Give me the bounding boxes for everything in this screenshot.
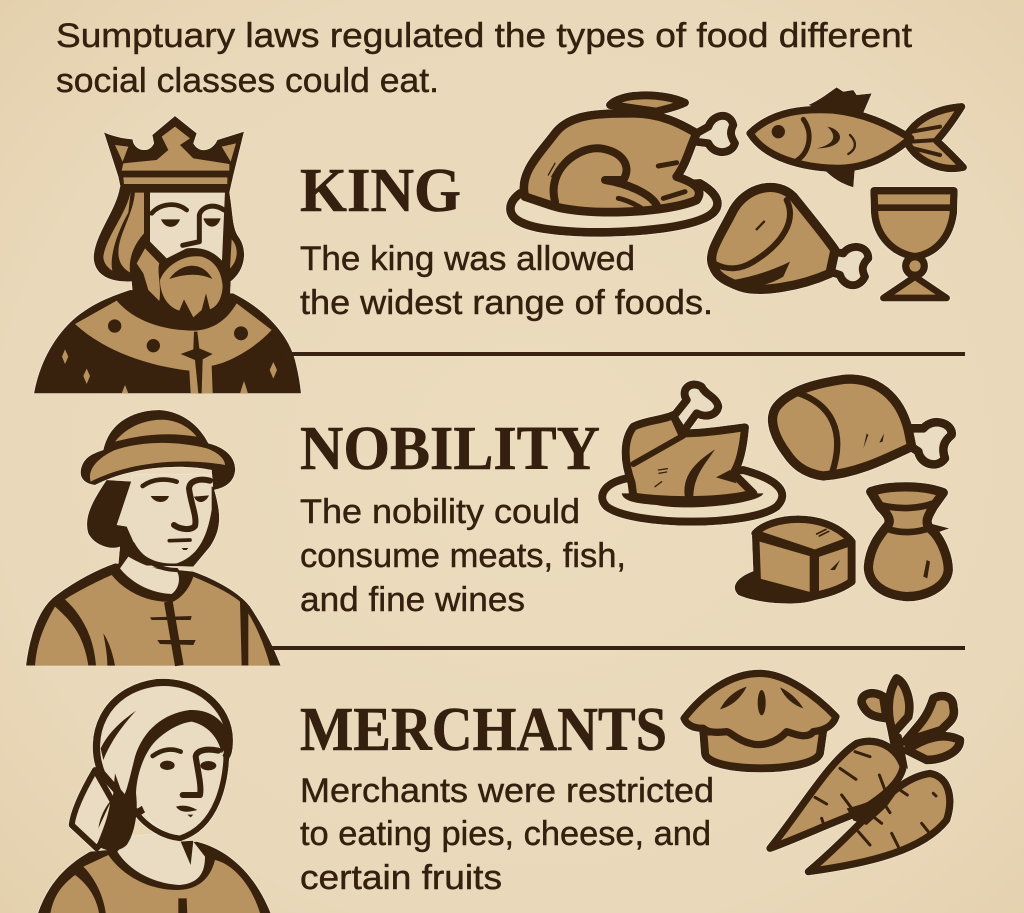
text: merchants description: Merchants were restricted <box>300 772 714 810</box>
icon: roast turkey on plate <box>510 95 735 232</box>
icon: fish <box>750 87 963 187</box>
icon: ham leg <box>712 187 868 289</box>
panel: nobility <box>26 379 952 666</box>
icon: goblet <box>873 191 955 298</box>
icons: nobility foods <box>602 379 952 604</box>
panel: king <box>34 87 963 393</box>
panel: merchants <box>37 673 960 913</box>
text: king description <box>300 240 713 322</box>
icon: king portrait <box>34 116 301 393</box>
heading: MERCHANTS: MERCHANTS <box>300 696 667 764</box>
icon: carrots <box>770 678 960 872</box>
text: king description: the widest range of foods. <box>300 284 713 322</box>
icon: noble portrait <box>26 410 281 666</box>
title: social classes could eat. <box>56 62 439 100</box>
icon: ham <box>773 379 952 476</box>
icon: wine jug <box>868 487 949 597</box>
heading: KING: KING <box>300 157 461 225</box>
divider line <box>272 646 965 650</box>
icons: merchant foods <box>684 673 960 872</box>
text: merchants description: to eating pies, cheese, and <box>300 815 711 853</box>
text: nobility description: The nobility could <box>300 493 580 531</box>
title <box>56 17 913 100</box>
title: Sumptuary laws regulated the types of food different <box>56 17 913 55</box>
icon: merchant portrait <box>37 682 271 913</box>
text: nobility description <box>300 493 626 619</box>
text: merchants description <box>300 772 714 897</box>
divider line <box>285 352 965 356</box>
text: merchants description: certain fruits <box>300 859 502 897</box>
text: king description: The king was allowed <box>300 240 635 278</box>
icons: king foods <box>510 87 963 298</box>
text: nobility description: consume meats, fish, <box>300 537 626 575</box>
icon: pie <box>684 673 836 768</box>
icon: bread block <box>735 519 852 604</box>
icon: roast chicken on plate <box>602 385 782 522</box>
text: nobility description: and fine wines <box>300 581 525 619</box>
heading: NOBILITY: NOBILITY <box>300 415 600 483</box>
